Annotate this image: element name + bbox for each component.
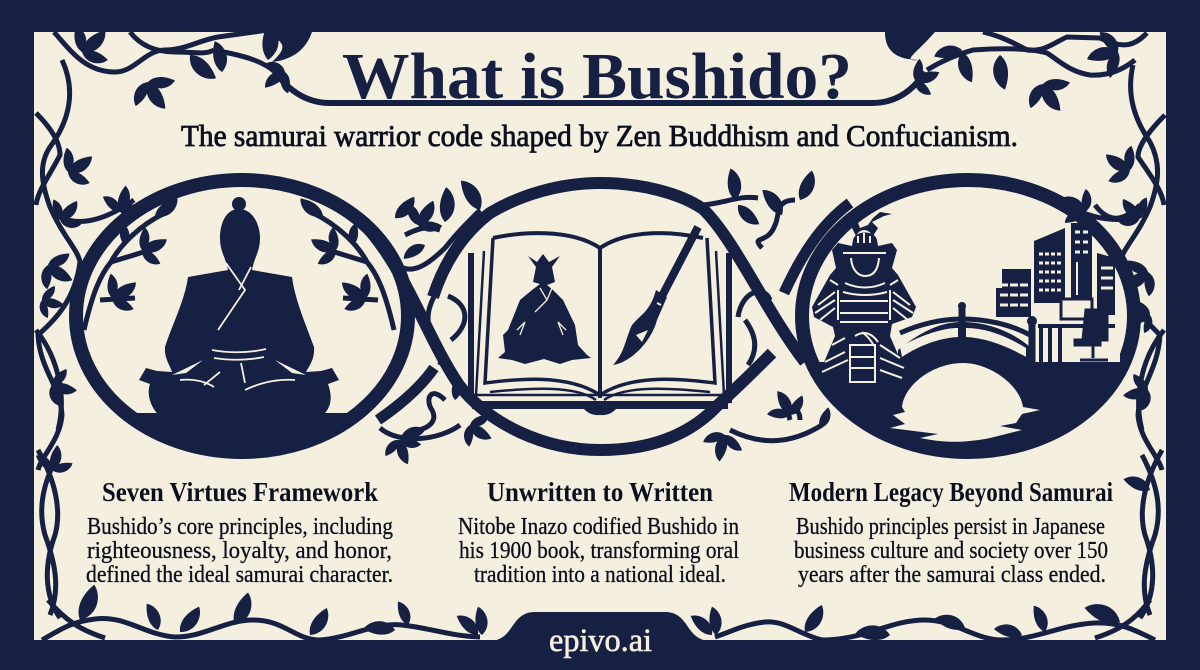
icon: meditating samurai in first circle (137, 197, 347, 445)
icon: samurai, bridge and city in third circle (812, 212, 1120, 445)
office desk and chair (1036, 299, 1120, 362)
icon: open book with samurai and brush (471, 227, 729, 415)
inner branches in first circle (84, 198, 394, 330)
footer brand tab: epivo.ai (549, 623, 652, 659)
armored samurai (812, 210, 916, 384)
city skyline (996, 223, 1115, 317)
body text (86, 514, 393, 588)
left and right leaves (56, 146, 95, 192)
body text: Nitobe Inazo codified Bushido in (458, 514, 739, 540)
body text: his 1900 book, transforming oral (459, 538, 739, 564)
body text: defined the ideal samurai character. (86, 562, 393, 588)
body text (458, 514, 739, 588)
top leaves (64, 19, 115, 76)
book pages (471, 233, 729, 405)
body text: Bushido principles persist in Japanese (796, 514, 1105, 540)
heading: Unwritten to Written (487, 477, 713, 507)
body text: Bushido’s core principles, including (87, 514, 393, 540)
body text: business culture and society over 150 (794, 538, 1108, 564)
bridge and base (820, 302, 1116, 445)
body text: years after the samurai class ended. (798, 562, 1106, 588)
heading: Seven Virtues Framework (102, 477, 378, 507)
panel: modern legacy (789, 477, 1113, 588)
footer brand tab (490, 612, 710, 659)
body text: righteousness, loyalty, and honor, (87, 538, 392, 564)
mini samurai silhouette (498, 254, 591, 364)
bottom leaves (68, 585, 107, 622)
title with underline: What is Bushido? (342, 40, 852, 113)
brush (613, 227, 698, 365)
panel: seven virtues framework (86, 477, 393, 588)
heading: Modern Legacy Beyond Samurai (789, 477, 1113, 507)
body text (794, 514, 1108, 588)
panel: unwritten to written (458, 477, 739, 588)
interlaced rings (76, 180, 1134, 452)
subtitle: The samurai warrior code shaped by Zen Buddhism and Confucianism. (181, 118, 1018, 153)
vines between the circles (397, 191, 450, 247)
body text: tradition into a national ideal. (474, 562, 726, 588)
